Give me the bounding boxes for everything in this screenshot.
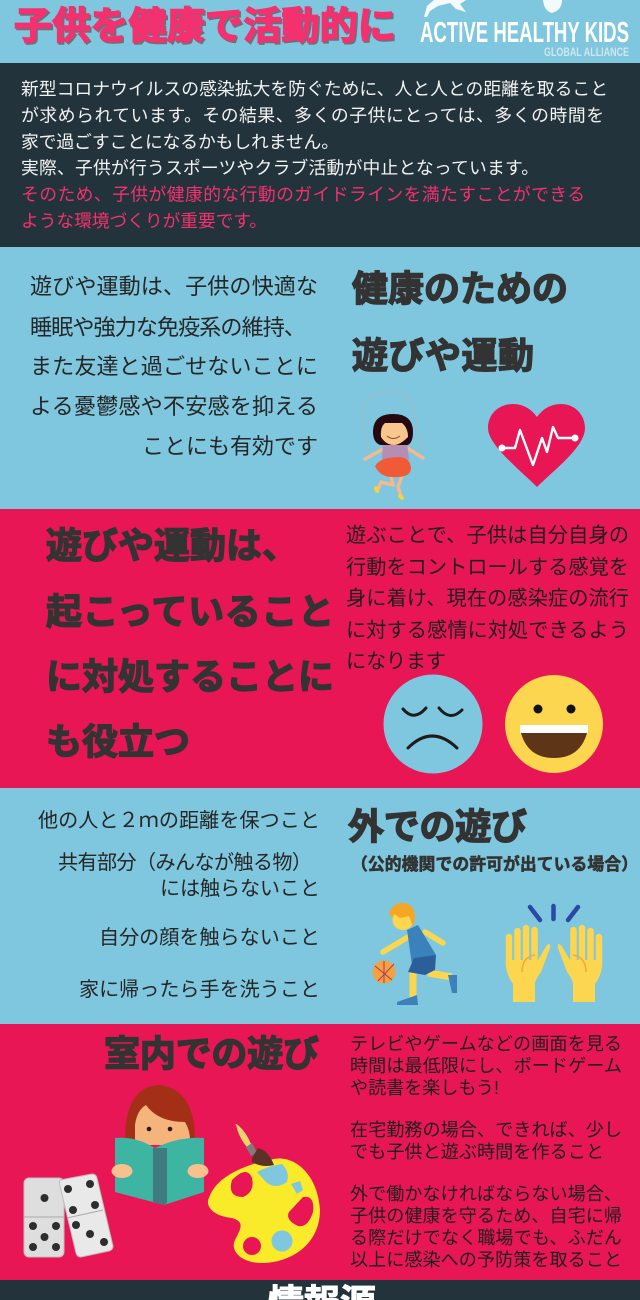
advice text: る際だけでなく職場でも、ふだん: [350, 1228, 622, 1248]
heading: 外での遊び: [348, 806, 527, 847]
intro text: 家で過ごすことになるかもしれません。: [21, 132, 339, 152]
icon: happy face: [505, 675, 603, 773]
body text: [30, 274, 318, 459]
body text: 遊びや運動は、子供の快適な: [30, 274, 318, 299]
advice text: 以上に感染への予防策を取ること: [350, 1250, 622, 1270]
heading: 室内での遊び: [104, 1033, 319, 1074]
intro text: [21, 79, 608, 178]
heading: [348, 806, 638, 874]
panel: play and exercise for health: [0, 248, 640, 509]
advice text: 子供の健康を守るため、自宅に帰: [350, 1206, 622, 1226]
intro highlight text: そのため、子供が健康的な行動のガイドラインを満たすことができる: [21, 184, 585, 204]
heading: 遊びや運動: [352, 335, 534, 376]
title: 子供を健康で活動的に: [14, 6, 396, 48]
body text: になります: [346, 651, 446, 673]
intro highlight text: [21, 184, 585, 231]
heading: に対処することに: [46, 656, 334, 697]
advice text: でも子供と遊ぶ時間を作ること: [350, 1142, 604, 1162]
heading: 健康のための: [352, 268, 568, 309]
body text: また友達と過ごせないことに: [30, 354, 318, 379]
panel: introduction: [0, 63, 640, 247]
intro text: が求められています。その結果、多くの子供にとっては、多くの時間を: [21, 106, 604, 126]
heading: も役立つ: [46, 721, 190, 762]
advice text: 外で働かなければならない場合、: [350, 1184, 622, 1204]
icon: paint palette and brush: [208, 1124, 320, 1263]
heading: 遊びや運動は、: [46, 525, 298, 566]
advice text: [350, 1034, 622, 1270]
advice text: 時間は最低限にし、ボードゲーム: [350, 1056, 622, 1076]
heading: [46, 525, 334, 762]
body text: 遊ぶことで、子供は自分自身の: [346, 524, 629, 547]
icon: sad face: [384, 674, 482, 774]
rules text: 他の人と２ｍの距離を保つこと: [38, 809, 320, 832]
body text: よる憂鬱感や不安感を抑える: [30, 394, 318, 419]
panel: play helps cope: [0, 509, 640, 788]
heading: 起こっていること: [46, 591, 334, 632]
body text: 行動をコントロールする感覚を: [346, 556, 629, 579]
intro text: 新型コロナウイルスの感染拡大を防ぐために、人と人との距離を取ること: [21, 79, 608, 99]
rules text: 自分の顔を触らないこと: [99, 926, 320, 949]
advice text: や読書を楽しもう!: [350, 1078, 499, 1098]
rules text: [38, 809, 320, 1001]
icon: dominoes: [24, 1174, 113, 1257]
rules text: 家に帰ったら手を洗うこと: [79, 978, 320, 1001]
intro highlight text: ような環境づくりが重要です。: [21, 211, 267, 231]
rules text: には触らないこと: [160, 877, 320, 900]
title: 子供を健康で活動的に: [16, 8, 398, 50]
advice text: 在宅勤務の場合、できれば、少し: [350, 1120, 622, 1140]
panel: sources footer: [0, 1280, 640, 1300]
heading: [352, 268, 568, 376]
body text: 身に着け、現在の感染症の流行: [346, 587, 629, 610]
icon: heart with pulse: [488, 404, 585, 487]
panel: playing outside: [0, 788, 640, 1024]
icon: raised hands: [506, 906, 602, 1002]
advice text: テレビやゲームなどの画面を見る: [350, 1034, 622, 1054]
panel: playing indoors: [0, 1024, 640, 1280]
subheading: （公的機関での許可が出ている場合）: [351, 854, 638, 874]
logo: Active Healthy Kids: [420, 0, 629, 59]
body text: ことにも有効です: [142, 434, 318, 459]
panel: header: [0, 0, 640, 64]
body text: 睡眠や強力な免疫系の維持、: [30, 315, 306, 340]
icon: child reading a book: [112, 1085, 208, 1205]
icon: girl skipping rope: [363, 392, 423, 498]
body text: に対する感情に対処できるよう: [346, 619, 629, 642]
intro text: 実際、子供が行うスポーツやクラブ活動が中止となっています。: [21, 157, 539, 178]
body text: [346, 524, 629, 673]
rules text: 共有部分（みんなが触る物）: [58, 851, 312, 874]
icon: child dribbling a basketball: [372, 903, 457, 1005]
